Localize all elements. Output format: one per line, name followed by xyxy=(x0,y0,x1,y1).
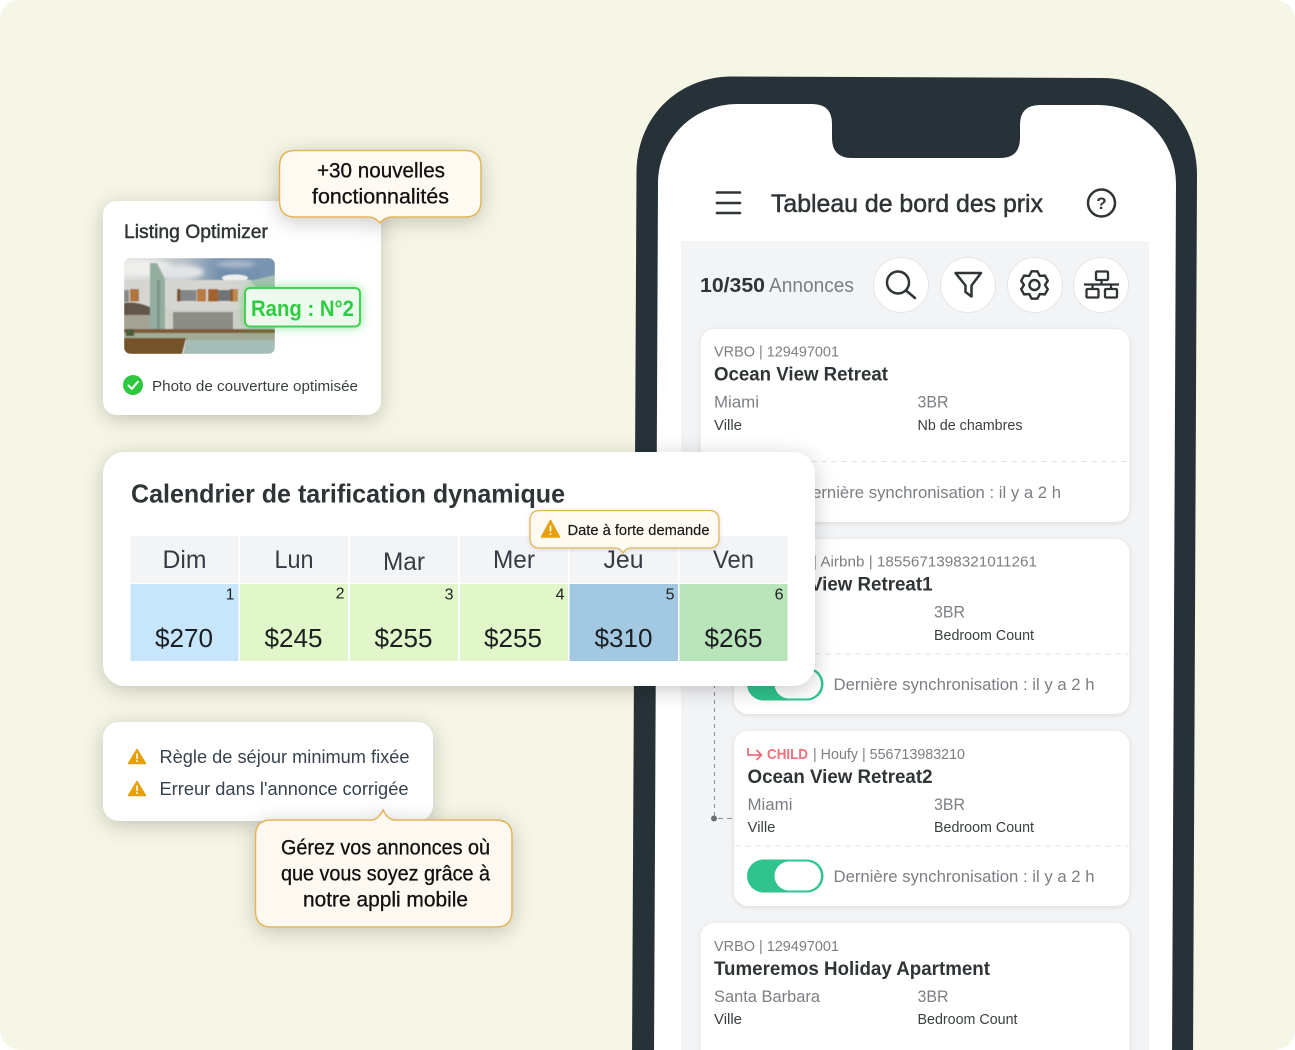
listing card 3: Bedroom Count xyxy=(934,820,1034,836)
calendar table: Mer xyxy=(493,546,535,574)
photo status: Photo de couverture optimisée xyxy=(152,378,358,395)
calendar table: 5 xyxy=(666,586,675,604)
listing source: | Houfy | 556713983210 xyxy=(813,747,965,763)
listing card 1: Dernière synchronisation : il y a 2 h xyxy=(800,483,1061,502)
callout: mobile app: notre appli mobile xyxy=(303,888,468,912)
icon: filter button xyxy=(940,258,996,312)
icon: warning xyxy=(128,750,146,764)
listing card 1: Miami xyxy=(714,392,759,412)
listing card 2 xyxy=(734,539,1130,714)
icon: check xyxy=(123,375,143,395)
listing card 2: Ocean View Retreat1 xyxy=(748,574,933,596)
callout: new features: +30 nouvelles xyxy=(317,160,445,182)
icon: search button xyxy=(874,258,928,312)
icon: network button xyxy=(1074,258,1128,312)
listing card 1 xyxy=(700,329,1130,522)
calendar table: $310 xyxy=(594,623,652,653)
alert text: Règle de séjour minimum fixée xyxy=(160,747,410,767)
icon: menu xyxy=(717,192,740,213)
calendar table: 4 xyxy=(556,586,565,604)
alert text: Erreur dans l'annonce corrigée xyxy=(160,779,408,799)
calendar table: 3 xyxy=(445,586,454,604)
listing card 3: 3BR xyxy=(934,795,965,814)
listing card 3 xyxy=(734,731,1130,906)
calendar heading: Calendrier de tarification dynamique xyxy=(131,478,565,508)
calendar table: 1 xyxy=(226,586,235,604)
callout: high demand date xyxy=(530,510,719,553)
listing card 4: 3BR xyxy=(918,987,948,1006)
panel: alerts xyxy=(103,722,433,821)
rank badge: Rang : N°2 xyxy=(251,296,354,321)
phone frame xyxy=(632,76,1197,1050)
listing count xyxy=(700,275,854,297)
calendar table: $245 xyxy=(264,623,322,653)
callout: new features: fonctionnalités xyxy=(312,186,449,208)
calendar table xyxy=(130,536,788,661)
child tag: CHILD xyxy=(767,747,808,763)
listing card 4: VRBO | 129497001 xyxy=(714,939,839,955)
listing card 3: Ville xyxy=(748,820,776,836)
icon: help: ? xyxy=(1096,194,1107,213)
panel: listing optimizer xyxy=(103,201,381,415)
listing card 1: VRBO | 129497001 xyxy=(714,344,839,360)
calendar table: 2 xyxy=(336,586,345,602)
icon: settings button xyxy=(1008,258,1062,312)
listing card 1: Ville xyxy=(714,418,742,434)
screen title: Tableau de bord des prix xyxy=(771,190,1043,218)
listing card 4: Bedroom Count xyxy=(918,1012,1018,1028)
calendar table: $270 xyxy=(155,623,213,653)
sync status: Dernière synchronisation : il y a 2 h xyxy=(834,867,1094,886)
listing card 2: Dernière synchronisation : il y a 2 h xyxy=(834,675,1094,694)
listing title: Ocean View Retreat2 xyxy=(748,767,932,788)
calendar table: $255 xyxy=(484,623,542,653)
panel: dynamic pricing calendar xyxy=(103,452,815,686)
rank badge xyxy=(245,288,360,326)
listing card 4 xyxy=(700,923,1130,1050)
listing card 3: Miami xyxy=(748,795,792,814)
icon: help xyxy=(1088,190,1115,216)
calendar table: $255 xyxy=(374,623,432,653)
listing count: 10/350 xyxy=(700,275,765,297)
listing count: Annonces xyxy=(769,275,854,297)
listing card 2: Bedroom Count xyxy=(934,628,1034,644)
calendar table: Lun xyxy=(274,546,314,574)
listing card 1: Nb de chambres xyxy=(918,418,1022,434)
phone screen xyxy=(654,104,1176,1050)
connector: parent to child listings xyxy=(711,660,734,822)
listing optimizer heading: Listing Optimizer xyxy=(124,222,269,243)
listing card 4: Ville xyxy=(714,1012,742,1028)
callout: mobile app: Gérez vos annonces où xyxy=(281,836,490,860)
callout: mobile app: que vous soyez grâce à xyxy=(281,862,490,886)
listing card 2: | Airbnb | 1855671398321011261 xyxy=(813,554,1037,570)
calendar table: Ven xyxy=(713,546,754,574)
calendar table: Jeu xyxy=(604,546,644,574)
calendar table: Dim xyxy=(162,546,206,574)
listing card 1: Ocean View Retreat xyxy=(714,364,889,386)
sync toggle xyxy=(747,860,824,892)
callout: high demand date: Date à forte demande xyxy=(568,522,710,539)
callout: new features xyxy=(280,150,481,223)
listing card 4: Santa Barbara xyxy=(714,987,821,1006)
listing card 1: 3BR xyxy=(918,392,948,412)
icon: warning xyxy=(128,782,146,796)
icon: child arrow xyxy=(748,748,762,760)
calendar table: 6 xyxy=(775,586,784,604)
house photo xyxy=(112,258,275,354)
listing card 4: Tumeremos Holiday Apartment xyxy=(714,959,991,980)
callout: mobile app xyxy=(256,810,512,927)
listing card 2: CHILD xyxy=(767,554,808,570)
phone mockup xyxy=(632,76,1197,1050)
listing panel xyxy=(681,241,1149,1050)
calendar table: $265 xyxy=(704,623,762,653)
listing card 2: 3BR xyxy=(934,602,965,622)
calendar table: Mar xyxy=(383,548,425,576)
